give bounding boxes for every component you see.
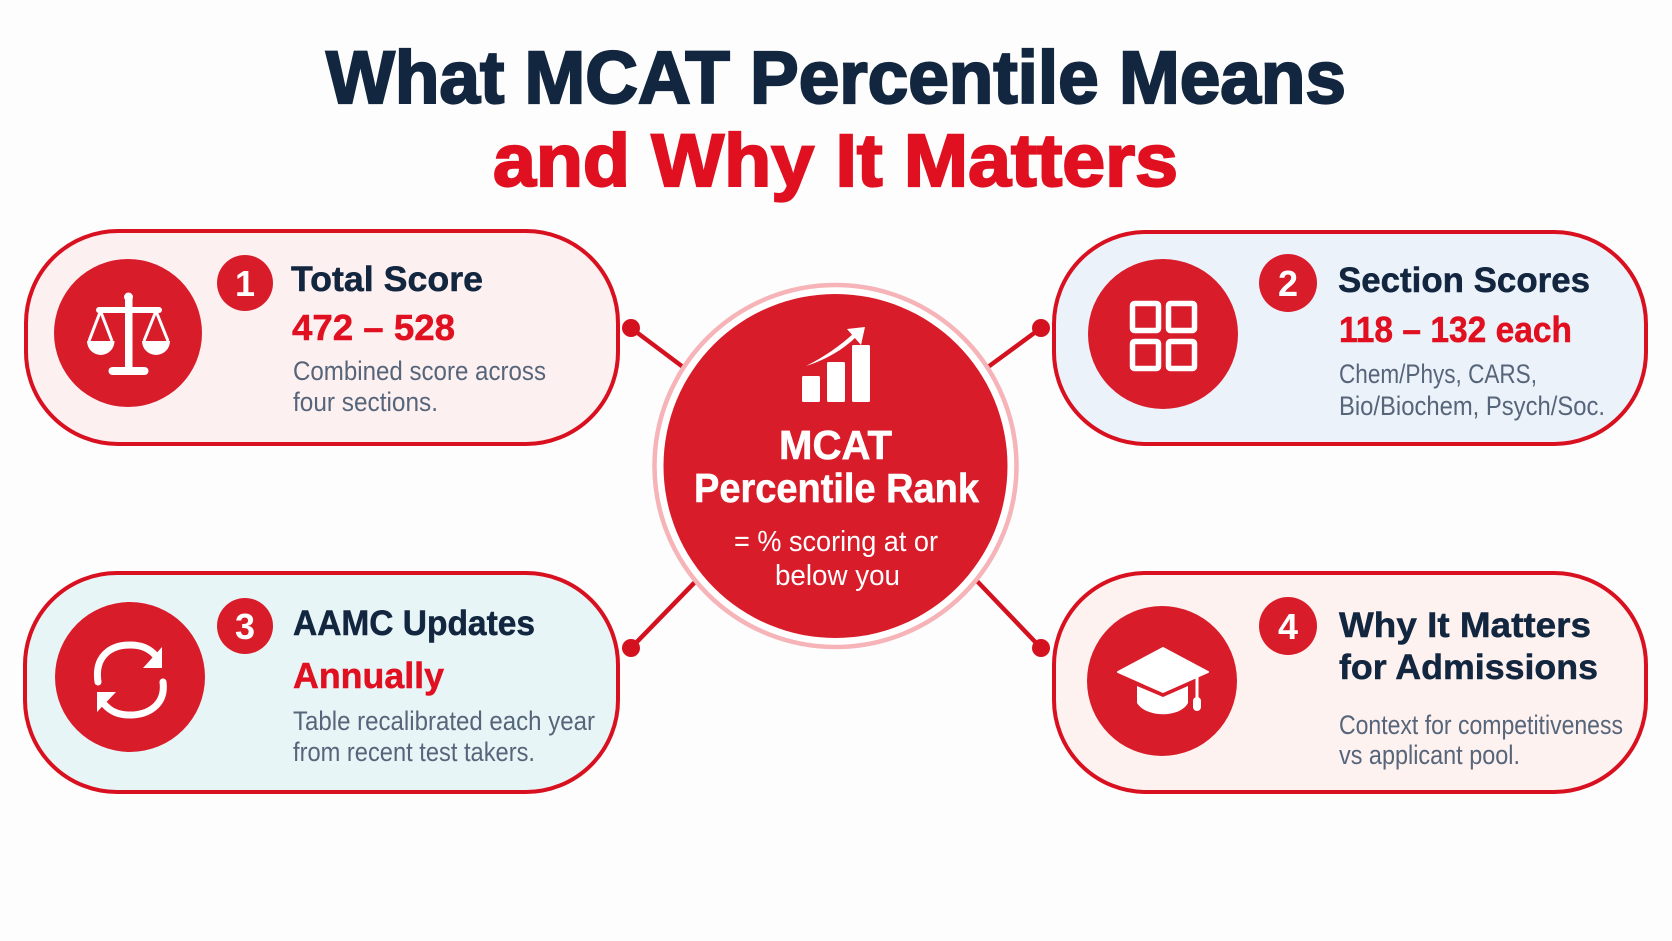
description: [293, 706, 595, 767]
value: 472-528: 472 – 528: [292, 307, 455, 348]
heading: section scores: Section Scores: [1338, 261, 1590, 300]
description: Chem/Phys, CARS,: [1339, 359, 1537, 389]
heading: why it matters for admissions: Why It Matters: [1339, 606, 1591, 645]
panel: section scores: [1054, 232, 1646, 444]
description: Table recalibrated each year: [293, 706, 595, 736]
center circle: mcat percentile rank: [654, 285, 1016, 647]
icon: four squares: [1088, 259, 1238, 409]
panel: total score: [26, 231, 618, 444]
description: from recent test takers.: [293, 737, 535, 767]
connector: center to card 2: [988, 319, 1050, 367]
center heading: MCAT: [779, 422, 892, 468]
connector: center to card 3: [622, 580, 697, 657]
badge: 3: [217, 598, 273, 654]
value: annually: Annually: [293, 655, 444, 696]
center definition: [734, 526, 938, 592]
center definition: below you: [775, 560, 900, 592]
description: [1339, 710, 1623, 770]
heading: why it matters for admissions: for Admissions: [1339, 648, 1598, 687]
badge: 2: [1259, 254, 1317, 312]
description: Context for competitiveness: [1339, 710, 1623, 740]
description: vs applicant pool.: [1339, 740, 1520, 770]
panel: aamc updates: [25, 573, 618, 792]
badge: 4: [1259, 597, 1317, 655]
badge: 2: 2: [1278, 263, 1298, 304]
value: 118-132 each: 118 – 132 each: [1339, 309, 1572, 350]
center heading: [694, 422, 979, 511]
badge: 1: 1: [235, 263, 255, 304]
heading: aamc updates: AAMC Updates: [293, 604, 535, 643]
badge: 3: 3: [235, 606, 255, 647]
connector: center to card 4: [976, 580, 1050, 657]
description: [293, 356, 546, 417]
icon: balance scale: [54, 259, 202, 407]
title: and Why It Matters: [493, 119, 1178, 202]
center heading: Percentile Rank: [694, 465, 979, 511]
badge: 4: 4: [1278, 606, 1298, 647]
title: What MCAT Percentile Means: [326, 36, 1346, 119]
description: Combined score across: [293, 356, 546, 386]
panel: why it matters: [1054, 573, 1646, 792]
icon: graduation cap: [1087, 606, 1237, 756]
connector: center to card 1: [622, 319, 683, 367]
heading: why it matters for admissions: [1339, 606, 1598, 687]
description: [1339, 359, 1605, 421]
description: four sections.: [293, 387, 438, 417]
icon: rising bar chart: [802, 327, 870, 402]
description: Bio/Biochem, Psych/Soc.: [1339, 391, 1605, 421]
badge: 1: [217, 255, 273, 311]
heading: total score: Total Score: [291, 260, 483, 299]
icon: refresh arrows: [55, 602, 205, 752]
title: [326, 36, 1346, 202]
center definition: = % scoring at or: [734, 526, 938, 558]
